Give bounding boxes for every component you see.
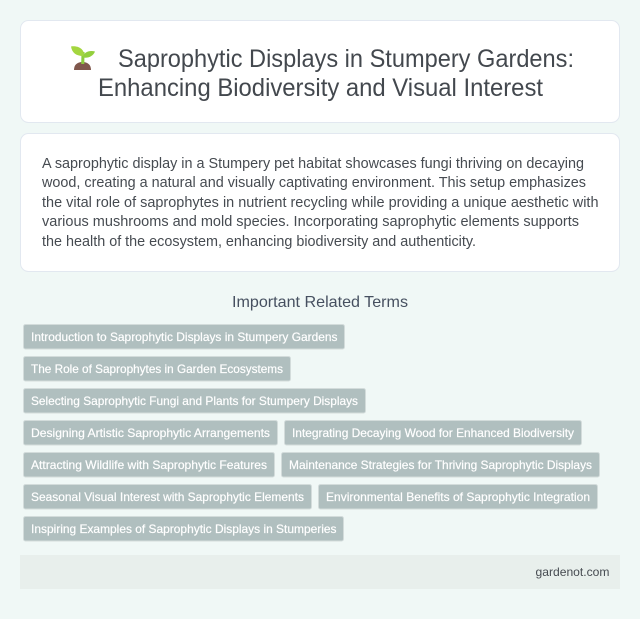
tag bbox=[284, 420, 582, 445]
tag: Designing Artistic Saprophytic Arrangements bbox=[31, 426, 270, 440]
tag: The Role of Saprophytes in Garden Ecosystems bbox=[31, 362, 283, 376]
tag bbox=[24, 324, 344, 349]
panel: title card bbox=[20, 20, 620, 122]
tag bbox=[318, 484, 598, 509]
tag bbox=[24, 452, 274, 477]
tag bbox=[24, 484, 312, 509]
tag: Attracting Wildlife with Saprophytic Features bbox=[31, 458, 267, 472]
footer text: gardenot.com bbox=[536, 565, 610, 579]
tag: Environmental Benefits of Saprophytic Integration bbox=[326, 490, 590, 504]
icon: seedling bbox=[71, 46, 95, 70]
tag: Selecting Saprophytic Fungi and Plants for Stumpery Displays bbox=[31, 394, 358, 408]
tag bbox=[24, 388, 366, 413]
tag bbox=[24, 420, 278, 445]
tag bbox=[24, 356, 290, 381]
tag bbox=[24, 516, 344, 541]
tag: Introduction to Saprophytic Displays in Stumpery Gardens bbox=[31, 330, 338, 344]
panel: description card bbox=[20, 134, 620, 272]
description text: various mushrooms and mold species. Incorporating saprophytic elements supports bbox=[42, 214, 579, 230]
tag: Integrating Decaying Wood for Enhanced Biodiversity bbox=[292, 426, 574, 440]
description text: A saprophytic display in a Stumpery pet habitat showcases fungi thriving on decaying bbox=[42, 156, 584, 172]
description text: the vital role of saprophytes in nutrient recycling while providing a unique aesthetic with bbox=[42, 195, 598, 211]
description text: the health of the ecosystem, enhancing biodiversity and authenticity. bbox=[42, 234, 476, 250]
tag: Seasonal Visual Interest with Saprophytic Elements bbox=[31, 490, 304, 504]
footer bar bbox=[20, 555, 620, 589]
heading: important related terms: Important Related Terms bbox=[232, 294, 408, 311]
title text: Enhancing Biodiversity and Visual Interest bbox=[98, 74, 543, 102]
description text: wood, creating a natural and visually captivating environment. This setup emphasizes bbox=[41, 175, 586, 191]
title text: Saprophytic Displays in Stumpery Gardens: bbox=[118, 45, 574, 73]
tag: Inspiring Examples of Saprophytic Displays in Stumperies bbox=[31, 522, 336, 536]
tag bbox=[282, 452, 600, 477]
tag: Maintenance Strategies for Thriving Saprophytic Displays bbox=[289, 458, 592, 472]
tag list bbox=[24, 324, 600, 541]
